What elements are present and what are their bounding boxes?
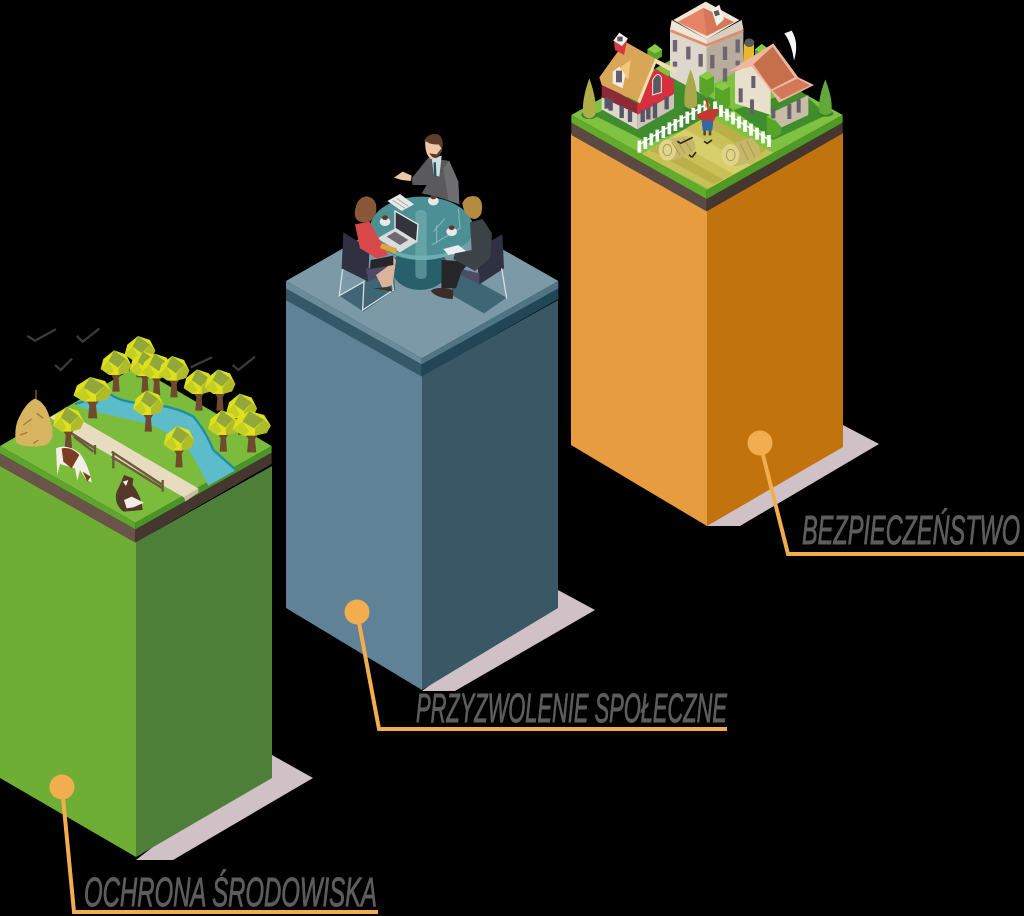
conifers — [581, 69, 833, 119]
callout: bezpieczeństwo — [748, 430, 1024, 554]
resting cow — [116, 475, 144, 512]
field — [642, 116, 773, 189]
panel: blue column (przyzwolenie społeczne) — [286, 134, 595, 691]
callout: przyzwolenie społeczne: PRZYZWOLENIE SPOŁECZNE — [416, 685, 727, 731]
seated woman in chair — [339, 196, 397, 310]
callout: ochrona środowiska: OCHRONA ŚRODOWISKA — [84, 869, 377, 915]
haystack — [15, 390, 53, 447]
papers, laptop and cups — [377, 194, 457, 252]
isometric farm illustration — [571, 2, 843, 211]
column faces — [0, 466, 272, 857]
dirt road — [50, 410, 198, 502]
isometric countryside illustration — [0, 329, 272, 543]
trees — [53, 336, 271, 467]
seated man in chair — [431, 196, 507, 299]
red barn — [599, 33, 677, 129]
green hedge cubes — [647, 44, 781, 138]
floor shadows — [339, 265, 507, 313]
standing man — [394, 134, 459, 204]
panel: green column (ochrona środowiska) — [0, 329, 313, 860]
isometric meeting illustration — [286, 134, 558, 377]
callout: ochrona środowiska — [50, 774, 378, 915]
white main house — [670, 2, 796, 97]
ground shadow — [422, 590, 595, 691]
callout: przyzwolenie społeczne — [344, 600, 727, 731]
cream house — [728, 43, 814, 127]
panel: orange column (bezpieczeństwo) — [571, 2, 879, 526]
glass table — [370, 197, 473, 290]
ground shadow — [136, 755, 313, 860]
column faces — [286, 300, 558, 690]
grazing cow — [56, 447, 92, 483]
river — [75, 394, 236, 486]
birds — [27, 329, 255, 370]
wooden fences — [72, 433, 163, 492]
scarecrow — [696, 99, 719, 135]
white picket fence — [638, 101, 771, 153]
hay bales — [659, 136, 760, 166]
ground shadow — [707, 425, 879, 526]
column faces — [571, 133, 843, 526]
